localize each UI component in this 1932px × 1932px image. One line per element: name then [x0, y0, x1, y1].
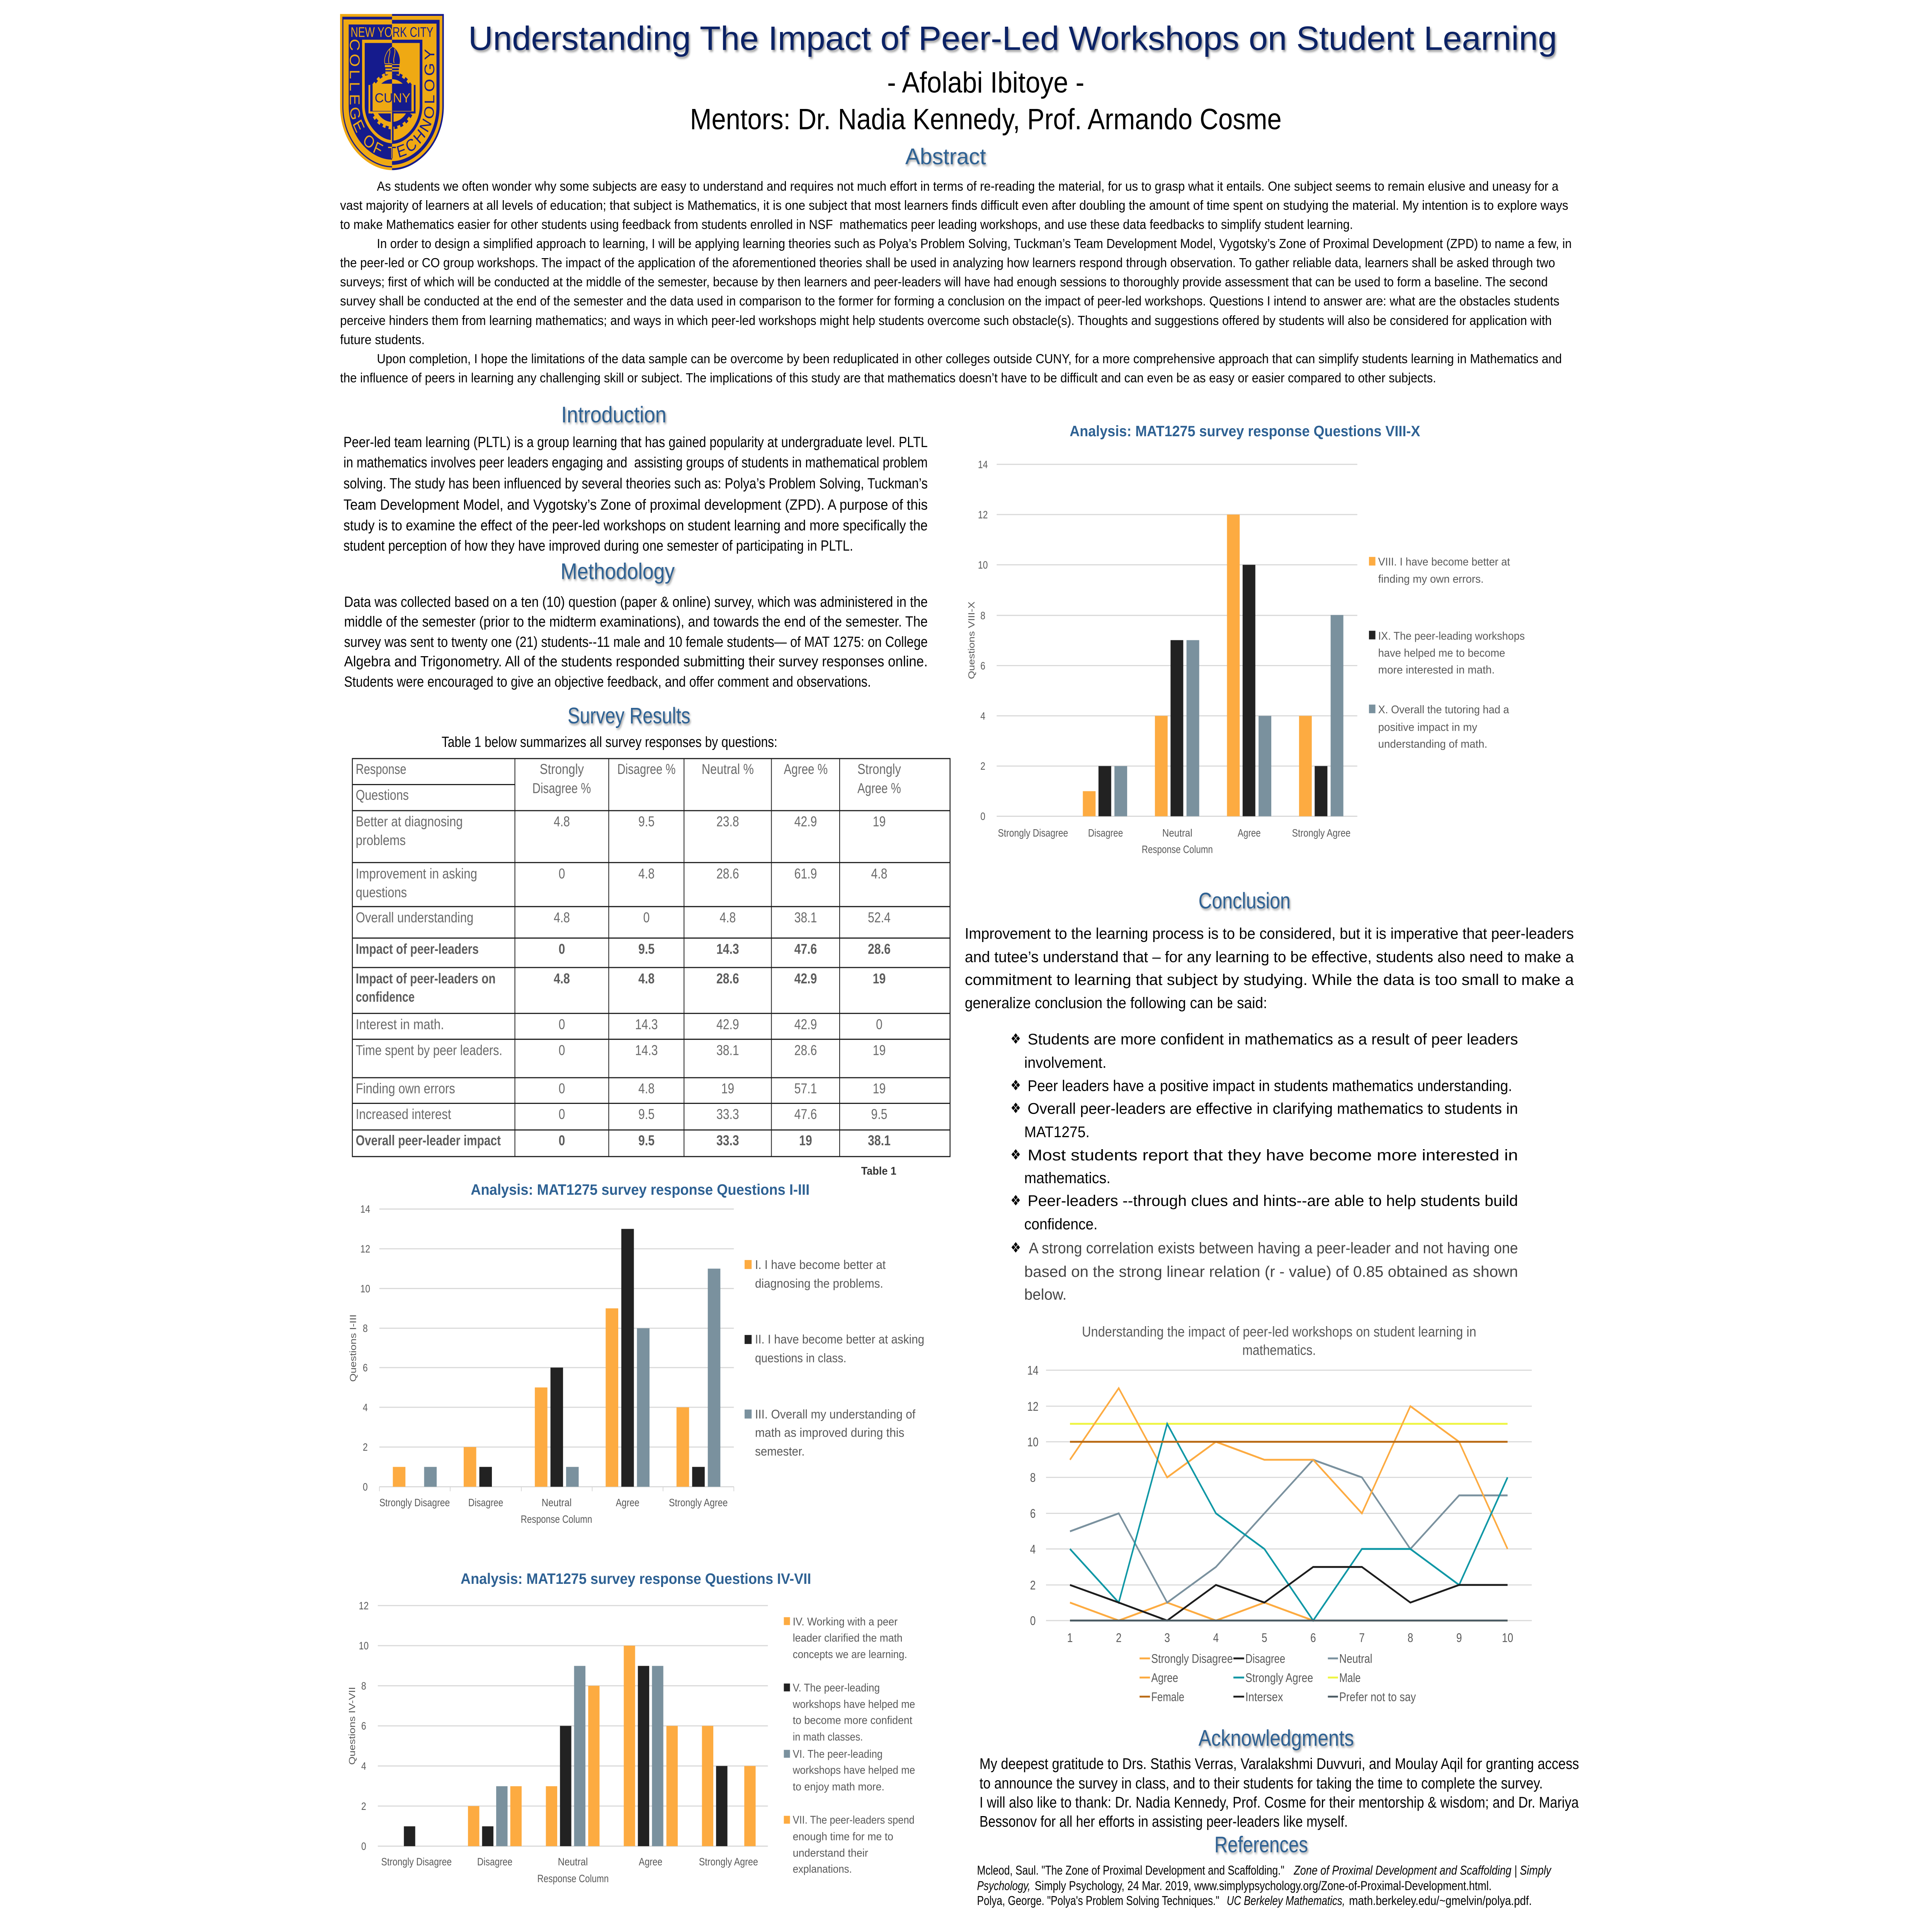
y axis labels: line chart: 4	[1030, 1543, 1036, 1556]
table row: impact on confidence: 4.8	[638, 971, 655, 987]
x axis labels: chart VIII-X: Strongly Agree	[1292, 827, 1350, 839]
bars: chart IV-VII	[404, 1646, 756, 1846]
chart title: line chart: mathematics.	[1242, 1343, 1316, 1358]
table label: Table 1	[861, 1164, 896, 1177]
heading: introduction: Introduction	[561, 403, 667, 427]
y axis labels: chart IV-VII: 10	[359, 1640, 369, 1652]
line series: female	[1070, 1441, 1508, 1443]
table row: better at diagnosing problems: 19	[873, 814, 886, 830]
list: conclusion bullets: below.	[1024, 1286, 1066, 1303]
x axis labels: chart I-III: Agree	[616, 1497, 639, 1509]
legend: chart IV-VII: VI. The peer-leading	[793, 1748, 883, 1760]
table caption: Table 1 below summarizes all survey responses by questions:	[442, 734, 777, 750]
table row: interest in math: 0	[876, 1017, 883, 1032]
y axis title: chart I-III: Questions I-III	[349, 1315, 358, 1382]
x axis labels: chart I-III: Response Column	[521, 1514, 592, 1525]
table row: increased interest: 9.5	[638, 1107, 655, 1122]
title: Understanding The Impact of Peer-Led Workshops on Student Learning	[468, 19, 1557, 57]
heading: references: References	[1214, 1832, 1308, 1857]
table header row: Disagree %	[532, 781, 591, 796]
y axis labels: chart IV-VII: 12	[359, 1600, 369, 1612]
chart title: questions IV-VII: Analysis: MAT1275 survey response Questions IV-VII	[461, 1570, 811, 1587]
table row: overall peer-leader impact	[356, 1133, 891, 1149]
table row: better at diagnosing problems: problems	[356, 833, 406, 849]
list: conclusion bullets: ❖	[1010, 1192, 1021, 1209]
x axis labels: chart VIII-X	[998, 827, 1350, 855]
list: conclusion bullets: confidence.	[1024, 1215, 1097, 1233]
table header row: Strongly	[857, 762, 901, 777]
table row: improvement in asking questions: Improvement in asking	[356, 866, 477, 882]
table row: overall peer-leader impact: 0	[559, 1133, 565, 1149]
legend: chart I-III: diagnosing the problems.	[755, 1277, 883, 1291]
table row: interest in math: 42.9	[794, 1017, 817, 1032]
table row: overall peer-leader impact: 19	[799, 1133, 812, 1149]
legend: chart VIII-X: positive impact in my	[1378, 721, 1478, 733]
x axis labels: chart IV-VII: Strongly Disagree	[381, 1856, 452, 1868]
table row: impact of peer-leaders: Impact of peer-leaders	[356, 942, 479, 957]
text block: abstract: As students we often wonder why some subjects are easy to understand and requires not much effort in terms of re-reading the material, for us to grasp what it entails. One subject seems to remain elusive and uneasy for a	[377, 179, 1559, 194]
legend: chart I-III: semester.	[755, 1445, 805, 1459]
y axis labels: chart I-III: 2	[363, 1442, 368, 1453]
table row: interest in math: 42.9	[716, 1017, 739, 1032]
table: survey responses	[352, 759, 950, 1156]
y axis labels: line chart: 8	[1030, 1471, 1036, 1485]
text block: introduction	[344, 434, 928, 554]
list: conclusion bullets: ❖	[1010, 1240, 1021, 1256]
x axis labels: line chart: 3	[1164, 1631, 1170, 1645]
x axis labels: line chart: 1	[1067, 1631, 1073, 1645]
y axis labels: chart I-III: 6	[363, 1362, 368, 1374]
y axis labels: chart I-III: 12	[360, 1243, 370, 1255]
x axis labels: chart I-III: Strongly Agree	[669, 1497, 728, 1509]
table row: increased interest: Increased interest	[356, 1107, 451, 1122]
table row: finding own errors: 4.8	[638, 1081, 655, 1097]
table header row: Response	[356, 762, 406, 777]
table header row: Disagree %	[617, 762, 675, 777]
y axis title: chart IV-VII: Questions IV-VII	[347, 1687, 357, 1765]
list: conclusion bullets: ❖	[1010, 1031, 1021, 1047]
table row: time spent by peer leaders: 38.1	[716, 1043, 739, 1058]
text block: abstract: vast majority of learners at all levels of education; that subject is Mathematics, it is one subject that most learners finds difficult even after doubling the amount of time spent on studying the material. My intention is to explore ways	[340, 198, 1568, 213]
text block: acknowledgments	[980, 1755, 1579, 1830]
bar chart: questions IV-VII	[347, 1600, 915, 1885]
text block: abstract: survey shall be conducted at the end of the semester and the data used in comparison to the former for forming a conclusion on the impact of peer-led workshops. Questions I intend to answer are: what are the obstacles students	[340, 294, 1560, 308]
table row: increased interest: 9.5	[871, 1107, 887, 1122]
table row: improvement in asking questions: questions	[356, 885, 407, 901]
text block: conclusion intro: and tutee’s understand that – for any learning to be effective, students also need to make a	[965, 948, 1574, 966]
y axis labels: chart IV-VII: 6	[361, 1720, 366, 1732]
logo text: New York City: NEW YORK CITY	[350, 25, 434, 40]
table row: overall peer-leader impact: Overall peer-leader impact	[356, 1133, 501, 1149]
heading: methodology: Methodology	[561, 559, 675, 584]
legend: chart IV-VII: IV. Working with a peer	[793, 1615, 898, 1628]
x axis labels: chart IV-VII: Neutral	[558, 1856, 588, 1868]
table row: impact on confidence: 42.9	[794, 971, 817, 987]
y axis labels: chart VIII-X: 4	[980, 710, 985, 722]
table header row: Agree %	[857, 781, 901, 796]
legend: chart IV-VII: workshops have helped me	[793, 1764, 915, 1776]
y axis labels: chart VIII-X: 12	[978, 509, 988, 521]
y axis labels: chart VIII-X: 14	[978, 459, 988, 471]
legend: line chart: Prefer not to say	[1339, 1690, 1416, 1704]
y axis labels: chart I-III: 0	[363, 1481, 368, 1493]
x axis labels: chart I-III: Neutral	[542, 1497, 571, 1509]
table row: impact of peer-leaders: 0	[559, 942, 565, 957]
legend: line chart: Intersex	[1245, 1690, 1283, 1704]
table row: finding own errors: 0	[559, 1081, 565, 1097]
line series: strongly agree	[1070, 1424, 1508, 1621]
text block: abstract: future students.	[340, 332, 425, 347]
y axis labels: line chart	[1027, 1364, 1039, 1628]
text block: abstract: surveys; first of which will be conducted at the middle of the semester, because by then learners and peer-leaders will have had enough sessions to thoroughly provide assessment that can be used to form a baseline. The second	[340, 274, 1548, 289]
logo book: CUNY	[375, 90, 410, 105]
y axis labels: chart VIII-X: 8	[980, 610, 985, 622]
table header row: Strongly	[540, 762, 584, 777]
legend: chart VIII-X: understanding of math.	[1378, 738, 1487, 750]
table row: better at diagnosing problems: 23.8	[716, 814, 739, 830]
table row: impact of peer-leaders	[356, 942, 891, 957]
legend: chart IV-VII: enough time for me to	[793, 1830, 893, 1843]
table row: impact on confidence: 4.8	[554, 971, 570, 987]
text block: introduction: student perception of how they have improved during one semester of participating in PLTL.	[344, 538, 853, 554]
table row: interest in math: 0	[559, 1017, 565, 1032]
y axis labels: chart IV-VII: 8	[361, 1680, 366, 1692]
legend: chart I-III: I. I have become better at	[755, 1259, 886, 1272]
list: conclusion bullets: Overall peer-leaders are effective in clarifying mathematics to students in	[1028, 1100, 1518, 1117]
line series: strongly disagree	[1070, 1602, 1508, 1621]
text block: conclusion intro: commitment to learning that subject by studying. While the data is too small to make a	[965, 971, 1574, 988]
table row: interest in math	[356, 1017, 883, 1032]
text block: conclusion intro: generalize conclusion the following can be said:	[965, 994, 1267, 1012]
table row: increased interest	[356, 1107, 887, 1122]
chart title: questions I-III: Analysis: MAT1275 survey response Questions I-III	[471, 1181, 810, 1198]
y axis labels: chart I-III: 8	[363, 1323, 368, 1335]
y axis labels: chart I-III: 10	[360, 1283, 370, 1295]
table row: increased interest: 0	[559, 1107, 565, 1122]
x axis labels: line chart: 7	[1359, 1631, 1365, 1645]
x axis labels: chart IV-VII: Response Column	[537, 1873, 609, 1885]
text block: methodology	[344, 594, 928, 690]
heading: survey results: Survey Results	[568, 704, 690, 728]
legend: chart I-III: math as improved during this	[755, 1426, 904, 1440]
chart title: line chart	[1082, 1324, 1476, 1358]
y axis labels: chart IV-VII: 2	[361, 1801, 366, 1812]
x axis labels: line chart: 5	[1262, 1631, 1267, 1645]
table row: time spent by peer leaders	[356, 1043, 886, 1058]
legend: chart IV-VII: leader clarified the math	[793, 1631, 903, 1644]
table row: impact of peer-leaders: 14.3	[716, 942, 739, 957]
table row: improvement in asking questions	[356, 866, 887, 901]
x axis labels: line chart: 9	[1456, 1631, 1462, 1645]
y axis labels: chart IV-VII: 0	[361, 1841, 366, 1852]
legend: line chart: Male	[1339, 1672, 1361, 1685]
x axis labels: chart VIII-X: Disagree	[1088, 827, 1123, 839]
text block: conclusion intro	[965, 925, 1574, 1012]
x axis labels: chart IV-VII: Disagree	[477, 1856, 512, 1868]
logo gear	[370, 73, 414, 128]
table row: impact on confidence: confidence	[356, 990, 415, 1005]
table row: overall peer-leader impact: 9.5	[638, 1133, 655, 1149]
legend: chart VIII-X: finding my own errors.	[1378, 573, 1484, 585]
legend: line chart: Neutral	[1339, 1652, 1372, 1666]
text block: acknowledgments: I will also like to thank: Dr. Nadia Kennedy, Prof. Cosme for their mentorship & wisdom; and Dr. Mariya	[980, 1794, 1579, 1811]
list: conclusion bullets: Peer leaders have a positive impact in students mathematics understanding.	[1028, 1077, 1512, 1094]
legend: chart VIII-X: IX. The peer-leading workshops	[1378, 629, 1525, 642]
text block: references: Psychology,	[977, 1879, 1031, 1893]
text block: introduction: solving. The study has been influenced by several theories such as: Polya’s Problem Solving, Tuckman’s	[344, 476, 928, 492]
y axis labels: line chart: 14	[1027, 1364, 1039, 1378]
legend: chart VIII-X: more interested in math.	[1378, 663, 1495, 676]
text block: acknowledgments: Bessonov for all her efforts in assisting peer-leaders like myself.	[980, 1813, 1348, 1830]
legend: chart IV-VII: understand their	[793, 1847, 868, 1859]
line series: prefer not to say	[1070, 1619, 1508, 1621]
legend: chart IV-VII: to enjoy math more.	[793, 1780, 884, 1793]
y axis labels: chart I-III	[360, 1204, 370, 1493]
legend: chart I-III: II. I have become better at asking	[755, 1333, 924, 1347]
table row: increased interest: 33.3	[716, 1107, 739, 1122]
text block: abstract: the peer-led or CO group workshops. The impact of the application of the aforementioned theories shall be used in analyzing how learners respond through observation. To gather reliable data, learners shall be asked through two	[340, 255, 1555, 270]
heading: acknowledgments: Acknowledgments	[1199, 1726, 1354, 1751]
table row: improvement in asking questions: 0	[559, 866, 565, 882]
chart title: questions VIII-X: Analysis: MAT1275 survey response Questions VIII-X	[1070, 423, 1420, 440]
y axis labels: line chart: 2	[1030, 1579, 1036, 1592]
text block: abstract: to make Mathematics easier for other students using feedback from students enrolled in NSF mathematics peer leading workshops, and use these data feedbacks to simplify student learning.	[340, 217, 1353, 232]
y axis labels: chart I-III: 4	[363, 1402, 368, 1413]
text block: conclusion intro: Improvement to the learning process is to be considered, but it is imperative that peer-leaders	[965, 925, 1574, 942]
table row: time spent by peer leaders: 28.6	[794, 1043, 817, 1058]
table row: time spent by peer leaders: 19	[873, 1043, 886, 1058]
table row: improvement in asking questions: 61.9	[794, 866, 817, 882]
line chart: impact of peer-led workshops	[1027, 1364, 1532, 1704]
icon: college logo shield	[340, 14, 444, 170]
table header row: Neutral %	[702, 762, 754, 777]
x axis labels: chart IV-VII: Strongly Agree	[699, 1856, 758, 1868]
list: conclusion bullets	[1010, 1031, 1518, 1303]
list: conclusion bullets: based on the strong linear relation (r - value) of 0.85 obtained as shown	[1024, 1263, 1518, 1280]
table header row: Questions	[356, 787, 409, 803]
table row: better at diagnosing problems: 9.5	[638, 814, 655, 830]
text block: acknowledgments: My deepest gratitude to Drs. Stathis Verras, Varalakshmi Duvvuri, and Moulay Aqil for granting access	[980, 1755, 1579, 1772]
text block: references: UC Berkeley Mathematics,	[1227, 1894, 1345, 1908]
x axis labels: line chart	[1067, 1631, 1513, 1645]
table row: better at diagnosing problems: 42.9	[794, 814, 817, 830]
legend: chart IV-VII: explanations.	[793, 1862, 852, 1875]
legend: line chart: Disagree	[1245, 1652, 1285, 1666]
x axis labels: chart I-III: Disagree	[468, 1497, 503, 1509]
legend: chart IV-VII	[784, 1615, 915, 1875]
x axis labels: chart I-III: Strongly Disagree	[379, 1497, 450, 1509]
y axis labels: chart IV-VII	[359, 1600, 369, 1852]
x axis labels: chart VIII-X: Neutral	[1162, 827, 1192, 839]
mentors: Mentors: Dr. Nadia Kennedy, Prof. Armando Cosme	[690, 103, 1282, 136]
y axis labels: chart VIII-X: 6	[980, 660, 985, 672]
list: conclusion bullets: Peer-leaders --through clues and hints--are able to help students build	[1028, 1192, 1518, 1209]
table row: impact on confidence: 19	[873, 971, 886, 987]
legend: chart I-III	[745, 1259, 924, 1459]
legend: chart VIII-X: X. Overall the tutoring had a	[1378, 703, 1509, 716]
table row: overall peer-leader impact: 38.1	[868, 1133, 891, 1149]
list: conclusion bullets: A strong correlation exists between having a peer-leader and not having one	[1029, 1239, 1518, 1257]
table row: impact on confidence	[356, 971, 886, 1005]
table row: finding own errors	[356, 1081, 886, 1097]
text block: introduction: Peer-led team learning (PLTL) is a group learning that has gained popularity at undergraduate level. PLTL	[344, 434, 928, 451]
author: - Afolabi Ibitoye -	[887, 66, 1084, 99]
text block: abstract	[340, 179, 1571, 385]
list: conclusion bullets: MAT1275.	[1024, 1123, 1090, 1141]
table row: interest in math: Interest in math.	[356, 1017, 444, 1032]
bars: chart VIII-X	[1083, 515, 1344, 816]
text block: acknowledgments: to announce the survey in class, and to their students for taking the time to complete the survey.	[980, 1774, 1543, 1792]
table row: overall understanding	[356, 910, 891, 926]
legend: chart IV-VII: VII. The peer-leaders spend	[793, 1813, 915, 1826]
bars: chart I-III	[393, 1229, 720, 1487]
legend: line chart: Strongly Agree	[1245, 1672, 1313, 1685]
table row: interest in math: 14.3	[635, 1017, 658, 1032]
legend: chart IV-VII: workshops have helped me	[793, 1698, 915, 1711]
text block: references: Mcleod, Saul. "The Zone of Proximal Development and Scaffolding."	[977, 1864, 1284, 1878]
y axis labels: line chart: 12	[1027, 1400, 1039, 1413]
text block: methodology: survey was sent to twenty one (21) students--11 male and 10 female students— of MAT 1275: on College	[344, 634, 928, 650]
bar chart: questions I-III	[349, 1204, 924, 1525]
y axis title: chart VIII-X: Questions VIII-X	[967, 602, 977, 679]
table row: overall understanding: 38.1	[794, 910, 817, 926]
legend: chart IV-VII: concepts we are learning.	[793, 1648, 907, 1661]
list: conclusion bullets: Most students report that they have become more interested in	[1028, 1146, 1518, 1164]
heading: abstract: Abstract	[905, 144, 986, 169]
legend: chart I-III: III. Overall my understanding of	[755, 1408, 916, 1422]
x axis labels: line chart: 6	[1310, 1631, 1316, 1645]
table row: impact on confidence: Impact of peer-leaders on	[356, 971, 496, 987]
logo book	[369, 84, 415, 142]
x axis labels: line chart: 4	[1213, 1631, 1219, 1645]
table row: improvement in asking questions: 4.8	[638, 866, 655, 882]
legend: chart IV-VII: to become more confident	[793, 1714, 913, 1726]
text block: abstract: perceive hinders them from learning mathematics; and ways in which peer-led workshops might help students overcome such obstacle(s). Thoughts and suggestions offered by students will also be considered for application with	[340, 313, 1552, 328]
table row: overall understanding: 52.4	[868, 910, 891, 926]
table row: impact of peer-leaders: 47.6	[794, 942, 817, 957]
x axis labels: line chart: 10	[1502, 1631, 1513, 1645]
x axis labels: line chart: 2	[1116, 1631, 1122, 1645]
text block: abstract: Upon completion, I hope the limitations of the data sample can be overcome by been reduplicated in other colleges outside CUNY, for a more comprehensive approach that can simplify students learning in Mathematics and	[377, 351, 1562, 366]
table row: better at diagnosing problems: 4.8	[554, 814, 570, 830]
x axis labels: chart VIII-X: Response Column	[1142, 844, 1213, 855]
table row: increased interest: 47.6	[794, 1107, 817, 1122]
y axis labels: chart VIII-X: 2	[980, 760, 985, 772]
list: conclusion bullets: mathematics.	[1024, 1169, 1111, 1187]
text block: methodology: middle of the semester (prior to the midterm examinations), and towards the end of the semester. The	[344, 614, 928, 630]
table row: overall peer-leader impact: 33.3	[716, 1133, 739, 1149]
table row: impact on confidence: 28.6	[716, 971, 739, 987]
table row: overall understanding: 4.8	[719, 910, 736, 926]
list: conclusion bullets: ❖	[1010, 1077, 1021, 1094]
x axis labels: line chart: 8	[1408, 1631, 1413, 1645]
legend: line chart: Strongly Disagree	[1151, 1652, 1233, 1666]
text block: references: Polya, George. "Polya's Problem Solving Techniques."	[977, 1894, 1219, 1908]
legend: chart IV-VII: V. The peer-leading	[793, 1681, 880, 1694]
table row: improvement in asking questions: 28.6	[716, 866, 739, 882]
x axis labels: chart IV-VII	[381, 1856, 758, 1885]
text block: references: math.berkeley.edu/~gmelvin/polya.pdf.	[1349, 1894, 1532, 1908]
table row: overall understanding: Overall understanding	[356, 910, 473, 926]
y axis labels: chart I-III: 14	[360, 1204, 370, 1215]
table row: time spent by peer leaders: 14.3	[635, 1043, 658, 1058]
table row: impact of peer-leaders: 9.5	[638, 942, 655, 957]
line series: disagree	[1070, 1567, 1508, 1621]
list: conclusion bullets: Students are more confident in mathematics as a result of peer leaders	[1028, 1031, 1518, 1048]
y axis labels: line chart: 10	[1027, 1436, 1039, 1449]
y axis labels: chart VIII-X	[978, 459, 988, 823]
legend: line chart: Agree	[1151, 1672, 1178, 1685]
x axis labels: chart VIII-X: Agree	[1238, 827, 1261, 839]
table header row: Agree %	[784, 762, 828, 777]
y axis labels: line chart: 6	[1030, 1507, 1036, 1521]
poster	[340, 14, 1579, 1908]
legend: chart IV-VII: in math classes.	[793, 1730, 863, 1743]
table row: overall understanding: 0	[643, 910, 650, 926]
text block: abstract: the influence of peers in learning any challenging skill or subject. The implications of this study are that mathematics doesn’t have to be difficult and can even be as easy or easier compared to other subjects.	[340, 371, 1436, 385]
text block: introduction: Team Development Model, and Vygotsky’s Zone of proximal development (ZPD). A purpose of this	[344, 497, 928, 513]
text block: methodology: Students were encouraged to give an objective feedback, and offer comment and observations.	[344, 674, 871, 690]
logo text: College of Technology: COLLEGE OF TECHNOLOGY	[346, 39, 438, 162]
legend: line chart: Female	[1151, 1690, 1184, 1704]
list: conclusion bullets: ❖	[1010, 1100, 1021, 1116]
line series: male	[1070, 1423, 1508, 1425]
legend: chart VIII-X: VIII. I have become better at	[1378, 555, 1510, 568]
legend: chart I-III: questions in class.	[755, 1352, 846, 1365]
text block: references: Zone of Proximal Development and Scaffolding | Simply	[1294, 1864, 1552, 1878]
text block: references: Simply Psychology, 24 Mar. 2019, www.simplypsychology.org/Zone-of-Proximal-Development.html.	[1035, 1879, 1492, 1893]
y axis labels: chart VIII-X: 0	[980, 811, 985, 823]
chart title: line chart: Understanding the impact of peer-led workshops on student learning in	[1082, 1324, 1476, 1340]
logo torch	[384, 47, 400, 75]
legend: line chart	[1139, 1652, 1416, 1704]
table row: better at diagnosing problems	[356, 814, 886, 849]
table row: time spent by peer leaders: 0	[559, 1043, 565, 1058]
table row: impact of peer-leaders: 28.6	[868, 942, 891, 957]
table row: better at diagnosing problems: Better at diagnosing	[356, 814, 463, 830]
line series: agree	[1070, 1388, 1508, 1549]
x axis labels: chart I-III	[379, 1497, 728, 1525]
text block: abstract: In order to design a simplified approach to learning, I will be applying learning theories such as Polya’s Problem Solving, Tuckman’s Team Development Model, Vygotsky’s Zone of Proximal Development (ZPD) to name a few, in	[377, 236, 1571, 251]
heading: conclusion: Conclusion	[1199, 889, 1291, 913]
text block: introduction: study is to examine the effect of the peer-led workshops on student learning and more specifically the	[344, 518, 928, 534]
y axis labels: line chart: 0	[1030, 1614, 1036, 1628]
table row: finding own errors: Finding own errors	[356, 1081, 455, 1097]
table row: improvement in asking questions: 4.8	[871, 866, 887, 882]
list: conclusion bullets: involvement.	[1024, 1054, 1106, 1071]
table row: finding own errors: 19	[721, 1081, 734, 1097]
legend: chart VIII-X	[1369, 555, 1525, 750]
text block: introduction: in mathematics involves peer leaders engaging and assisting groups of students in mathematical problem	[344, 455, 928, 471]
y axis labels: chart IV-VII: 4	[361, 1760, 366, 1772]
y axis labels: chart VIII-X: 10	[978, 559, 988, 571]
table row: finding own errors: 19	[873, 1081, 886, 1097]
line series: neutral	[1070, 1460, 1508, 1602]
table row: finding own errors: 57.1	[794, 1081, 817, 1097]
x axis labels: chart IV-VII: Agree	[639, 1856, 662, 1868]
table row: time spent by peer leaders: Time spent by peer leaders.	[356, 1043, 502, 1058]
text block: methodology: Algebra and Trigonometry. All of the students responded submitting their survey responses online.	[344, 654, 928, 670]
text block: references	[977, 1864, 1552, 1908]
table row: overall understanding: 4.8	[554, 910, 570, 926]
x axis labels: chart VIII-X: Strongly Disagree	[998, 827, 1068, 839]
list: conclusion bullets: ❖	[1010, 1146, 1021, 1163]
bar chart: questions VIII-X	[967, 459, 1525, 855]
legend: chart VIII-X: have helped me to become	[1378, 646, 1505, 659]
table header row	[356, 762, 901, 803]
text block: methodology: Data was collected based on a ten (10) question (paper & online) survey, which was administered in the	[344, 594, 928, 610]
